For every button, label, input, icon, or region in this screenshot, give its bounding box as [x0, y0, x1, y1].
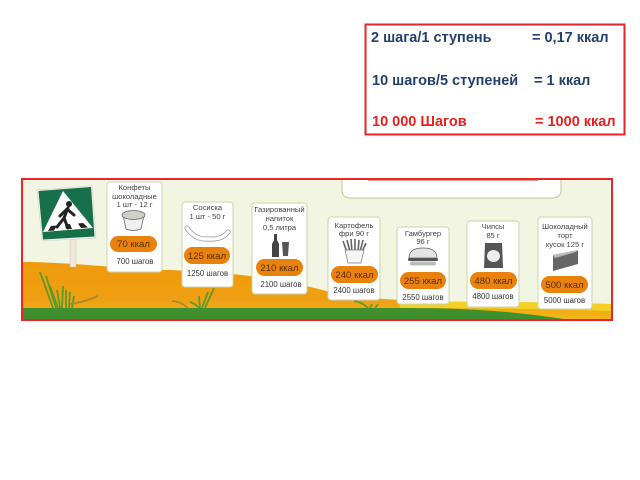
text: 10 000 steps: [372, 114, 616, 130]
icon: sausage: [187, 228, 228, 239]
card: chocolate candy: Конфеты: [118, 183, 150, 192]
text: 10 000 steps: 10 000 Шагов: [372, 114, 467, 130]
card: chocolate cake: торт: [557, 231, 573, 240]
card: sausage: Сосиска: [193, 203, 223, 212]
card: hamburger: 2550 шагов: [402, 293, 444, 302]
card: french fries: Картофель: [335, 221, 373, 230]
text: 10 steps per 5 stairs: 10 шагов/5 ступеней: [372, 73, 518, 89]
card: sausage: [182, 202, 233, 287]
card: sausage: 1 шт - 50 г: [190, 212, 226, 221]
text: 2 steps per stair: 2 шага/1 ступень: [371, 30, 492, 46]
icon: pedestrian crossing sign: [37, 186, 96, 267]
card: chocolate cake: 5000 шагов: [544, 296, 585, 305]
card: soda: Газированный: [254, 205, 305, 214]
pill: 255 kcal: 255 ккал: [404, 276, 442, 287]
pill: 70 kcal: 70 ккал: [117, 239, 150, 250]
pill: 500 kcal: 500 ккал: [545, 280, 584, 291]
icon: grass mid-left: [172, 288, 214, 308]
pill: 240 kcal: 240 ккал: [335, 270, 374, 281]
card: hamburger: [397, 227, 449, 304]
icon: chips bag: [484, 243, 503, 268]
text: 10 000 steps: = 1000 ккал: [535, 114, 616, 130]
card: chocolate candy: шоколадные: [112, 192, 157, 201]
card: soda: 2100 шагов: [260, 280, 302, 289]
text: 2 steps per stair: [371, 30, 609, 46]
card: soda: [252, 203, 307, 294]
card: chocolate cake: Шоколадный: [542, 222, 588, 231]
text: 2 steps per stair: = 0,17 ккал: [532, 30, 609, 46]
text: 10 steps per 5 stairs: = 1 ккал: [534, 73, 590, 89]
card: french fries: [328, 217, 380, 300]
card: soda: 0,5 литра: [263, 223, 297, 232]
card: sausage: 1250 шагов: [187, 269, 228, 278]
pill: 210 kcal: 210 ккал: [260, 263, 299, 274]
card: chips: 4800 шагов: [472, 292, 514, 301]
text: 10 steps per 5 stairs: [372, 73, 590, 89]
speech bubble, cut off at top: [342, 178, 561, 198]
icon: fries: [343, 239, 366, 263]
icon: hamburger: [408, 248, 438, 266]
card: hamburger: 96 г: [416, 237, 430, 246]
card: chocolate candy: 700 шагов: [117, 257, 153, 266]
icon: cake slice: [553, 250, 578, 271]
icon: grass center: [354, 301, 378, 308]
card: chips: [467, 221, 519, 307]
card: chips: Чипсы: [482, 222, 504, 231]
card: chocolate cake: [538, 217, 592, 309]
pill: 480 kcal: 480 ккал: [474, 276, 513, 287]
pill: 125 kcal: 125 ккал: [188, 251, 226, 262]
card: chocolate cake: кусок 125 г: [546, 240, 584, 249]
landscape background: [22, 179, 612, 320]
card: hamburger: Гамбургер: [405, 229, 441, 238]
card: soda: напиток: [266, 214, 294, 223]
card: chocolate candy: 1 шт - 12 г: [117, 200, 153, 209]
card: french fries: фри 90 г: [339, 229, 369, 238]
icon: grass left: [40, 272, 98, 308]
card: french fries: 2400 шагов: [333, 286, 375, 295]
panel: food calories landscape: [22, 178, 612, 320]
panel: calorie equivalents: [366, 24, 624, 134]
card: chocolate candy: [107, 182, 162, 272]
icon: bottle and glass: [272, 234, 289, 257]
card: chips: 85 г: [486, 231, 500, 240]
icon: candy: [122, 210, 145, 230]
